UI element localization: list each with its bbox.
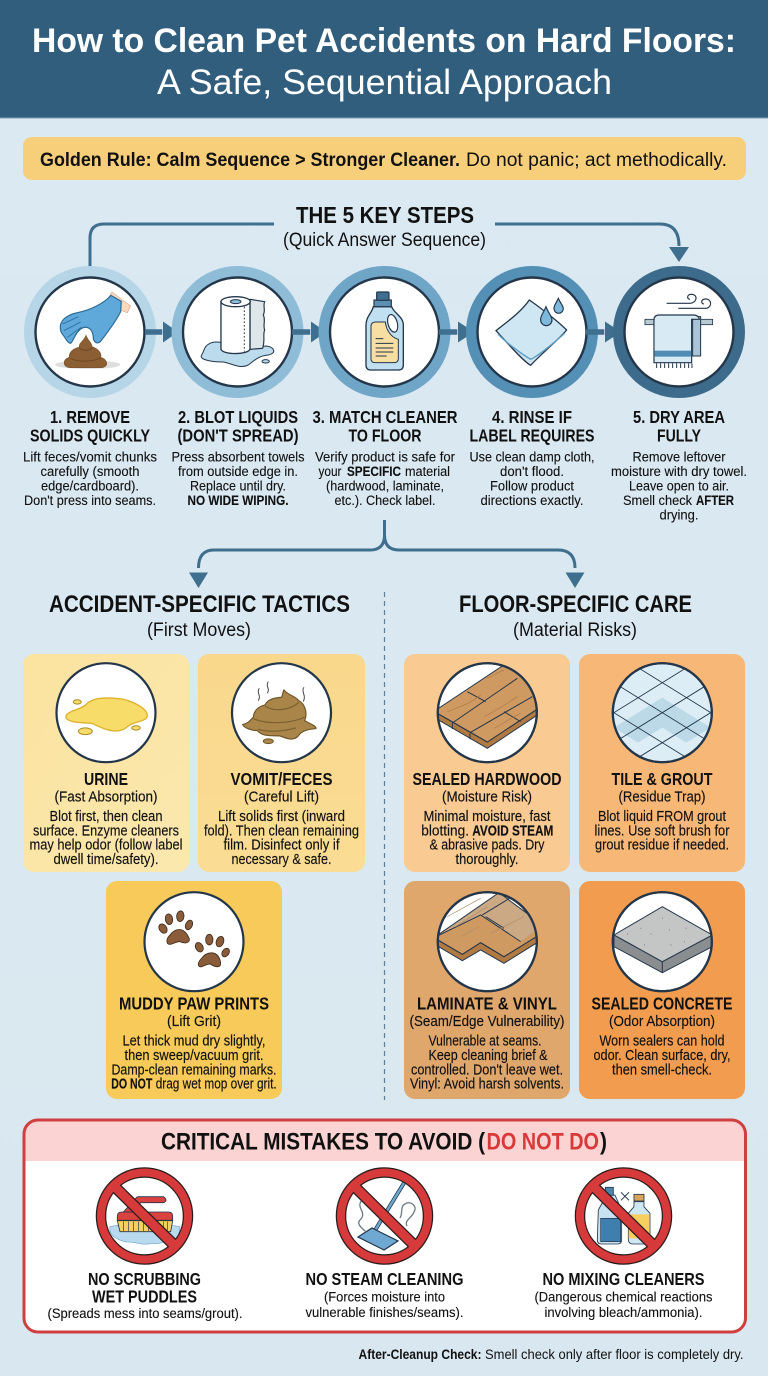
step 2 text: from outside edge in. [178,464,298,480]
step 5 text: Leave open to air. [629,478,729,494]
step 1 text: carefully (smooth [40,464,140,480]
icon: laminate planks [438,894,536,964]
title banner [0,0,768,118]
text: no steam cleaning: (Forces moisture into [324,1290,445,1306]
step 1 circle [30,272,150,392]
step 3 text: material [405,464,450,480]
heading: critical mistakes: ) [600,1128,607,1156]
arrow: step 1 to 2 [145,322,178,342]
step 4 text: LABEL REQUIRES [470,426,594,446]
panel: muddy paw prints: drag wet mop over grit. [156,1077,277,1093]
panel: sealed hardwood: SEALED HARDWOOD [412,769,562,789]
panel: tile and grout: Blot liquid FROM grout [598,809,726,825]
icon: damp cloth with drops [496,298,567,365]
step 1 text: Lift feces/vomit chunks [23,450,157,466]
panel: laminate and vinyl: Vinyl: Avoid harsh solvents. [410,1077,564,1093]
icon: towel on a rack drying [645,294,713,368]
step 5 text: FULLY [657,426,701,446]
footer note: After-Cleanup Check: [358,1346,482,1362]
icon: two muddy paw prints [157,911,231,967]
text: no mixing cleaners: (Dangerous chemical reactions [534,1290,712,1306]
heading: floor-specific care [459,591,692,641]
step 1 text: edge/cardboard). [41,478,139,494]
text: no mixing cleaners: NO MIXING CLEANERS [542,1269,704,1289]
step 1 text: Don't press into seams. [24,493,156,509]
step 5 text: moisture with dry towel. [611,464,747,480]
step 5 text: Remove leftover [632,450,726,466]
step 5 text: AFTER [696,493,734,509]
step 2 text [172,407,304,509]
panel: sealed concrete: (Odor Absorption) [609,1013,715,1030]
step 4 text: Use clean damp cloth, [470,450,594,466]
icon: urine puddle [66,698,147,735]
heading: floor-specific care: (Material Risks) [513,620,637,641]
panel: urine: surface. Enzyme cleaners [33,823,179,839]
heading: accident-specific tactics [49,591,350,641]
title banner: A Safe, Sequential Approach [157,63,612,102]
panel: tile and grout: grout residue if needed. [595,838,729,854]
heading: accident-specific tactics: (First Moves) [147,620,251,641]
panel: urine: dwell time/safety). [54,852,158,868]
step 1 text: 1. REMOVE [50,407,130,427]
arrow: step 3 to 4 [439,322,474,342]
step 4 text: don't flood. [500,464,564,480]
panel: vomit/feces [198,654,365,872]
text: no steam cleaning [306,1269,464,1321]
icon: feces pile with odor lines [243,682,316,744]
panel: urine [23,654,189,872]
panel: vomit/feces: necessary & safe. [232,852,332,868]
title banner: How to Clean Pet Accidents on Hard Floors: [32,22,736,60]
step 5 text: Smell check [623,493,693,509]
panel: vomit/feces: Lift solids first (inward [218,809,345,825]
panel: muddy paw prints: DO NOT [111,1077,152,1093]
heading: critical mistakes: CRITICAL MISTAKES TO AVOID ( [161,1128,485,1156]
step 3 text [312,407,458,509]
icon: tile grid [614,669,711,756]
panel: sealed concrete: Worn sealers can hold [600,1034,724,1050]
step 3 text: (hardwood, laminate, [326,478,444,494]
text: no mixing cleaners: involving bleach/ammonia). [544,1305,702,1321]
panel: urine: may help odor (follow label [30,838,182,854]
panel: sealed hardwood: thoroughly. [456,852,518,868]
panel: muddy paw prints [106,881,282,1099]
text: no steam cleaning: vulnerable finishes/seams). [306,1305,464,1321]
footer note [358,1346,744,1362]
arrow: sequence loop from step 1 to step 5 [90,224,689,267]
golden rule bar [23,137,746,180]
panel: vomit/feces: film. Disinfect only if [224,838,340,854]
text: no scrubbing: WET PUDDLES [92,1287,197,1307]
panel: urine: (Fast Absorption) [54,788,158,806]
step 4 text: directions exactly. [480,493,584,509]
panel: muddy paw prints: Let thick mud dry slightly, [122,1034,266,1050]
golden rule bar: Golden Rule: Calm Sequence > Stronger Cleaner. [40,150,460,171]
panel: vomit/feces: VOMIT/FECES [230,769,332,789]
panel: tile and grout: lines. Use soft brush for [594,823,730,839]
icon: no steam cleaning [341,1172,428,1260]
panel: laminate and vinyl: LAMINATE & VINYL [417,993,557,1013]
panel: sealed concrete: odor. Clean surface, dry, [594,1048,730,1064]
panel: muddy paw prints: (Lift Grit) [167,1013,221,1030]
text: no scrubbing: NO SCRUBBING [88,1269,201,1289]
panel: laminate and vinyl: (Seam/Edge Vulnerability) [410,1013,564,1030]
panel: muddy paw prints: then sweep/vacuum grit. [124,1048,264,1064]
heading: accident-specific tactics: ACCIDENT-SPECIFIC TACTICS [49,591,350,618]
panel: tile and grout: (Residue Trap) [618,788,706,806]
panel: laminate and vinyl: Vulnerable at seams. [428,1034,542,1050]
step 3 text: your [318,464,342,480]
icon: hardwood planks [438,666,536,749]
panel: sealed concrete: SEALED CONCRETE [592,993,732,1013]
icon: paper towel roll on a puddle [201,297,274,367]
icon: no scrubbing [101,1172,188,1260]
step 2 text: NO WIDE WIPING. [188,493,288,509]
panel: critical mistakes [24,1120,746,1332]
step 2 text: Replace until dry. [190,478,286,494]
golden rule bar: Do not panic; act methodically. [466,150,727,171]
step 3 text: TO FLOOR [348,426,422,446]
icon: no mixing cleaners [580,1172,667,1260]
step 1 text: SOLIDS QUICKLY [30,426,150,446]
step 1 text [23,407,157,509]
arrow: step 4 to 5 [586,322,621,342]
step 3 text: etc.). Check label. [334,493,436,509]
step 4 text: Follow product [490,478,574,494]
panel: vomit/feces: (Careful Lift) [244,788,319,806]
heading: the 5 key steps: (Quick Answer Sequence) [283,229,486,251]
step 3 circle [324,272,444,392]
text: no steam cleaning: NO STEAM CLEANING [306,1269,464,1289]
icon: cleaner bottle [366,292,403,370]
text: no scrubbing: (Spreads mess into seams/grout). [48,1306,242,1322]
step 3 text: Verify product is safe for [315,450,455,466]
panel: sealed concrete: then smell-check. [612,1062,712,1078]
step 4 text: 4. RINSE IF [492,407,572,427]
panel: sealed hardwood: (Moisture Risk) [442,788,532,806]
footer note: Smell check only after floor is completely dry. [485,1346,744,1362]
step 2 text: (DON'T SPREAD) [178,426,298,446]
arrow: step 2 to 3 [292,322,326,342]
step 2 text: Press absorbent towels [172,450,304,466]
heading: the 5 key steps [283,202,486,251]
step 3 text: 3. MATCH CLEANER [312,407,458,427]
step 2 text: 2. BLOT LIQUIDS [178,407,298,427]
panel: laminate and vinyl [404,881,570,1099]
panel: sealed concrete [579,881,745,1099]
step 5 text: 5. DRY AREA [633,407,725,427]
panel: vomit/feces: fold). Then clean remaining [204,823,359,839]
panel: sealed hardwood: Minimal moisture, fast [424,809,550,825]
panel: laminate and vinyl: Keep cleaning brief & [428,1048,548,1064]
panel: muddy paw prints: Damp-clean remaining marks. [112,1062,276,1078]
step 5 circle [619,272,739,392]
panel: urine: Blot first, then clean [50,809,162,825]
panel: laminate and vinyl: controlled. Don't leave wet. [411,1062,563,1078]
text: no mixing cleaners [534,1269,712,1321]
text: no scrubbing [48,1269,242,1322]
panel: urine: URINE [84,769,128,789]
step 4 text [470,407,594,509]
icon: gloved hand lifting solids [55,292,131,369]
panel: muddy paw prints: MUDDY PAW PRINTS [119,993,269,1013]
step 5 text [611,407,747,524]
icon: concrete slab [614,907,712,973]
arrow: branch to tactics and care [189,520,584,588]
panel: tile and grout: TILE & GROUT [612,769,713,789]
heading: floor-specific care: FLOOR-SPECIFIC CARE [459,591,692,618]
step 5 text: drying. [660,508,698,524]
step 4 circle [472,272,592,392]
heading: the 5 key steps: THE 5 KEY STEPS [296,202,474,228]
panel: sealed hardwood [404,654,570,872]
panel: sealed hardwood: AVOID STEAM [472,823,553,839]
heading: critical mistakes: DO NOT DO [486,1128,599,1156]
step 3 text: SPECIFIC [347,464,401,480]
step 2 circle [178,272,298,392]
panel: sealed hardwood: & abrasive pads. Dry [430,838,545,854]
panel: tile and grout [579,654,745,872]
panel: sealed hardwood: blotting. [421,823,469,839]
